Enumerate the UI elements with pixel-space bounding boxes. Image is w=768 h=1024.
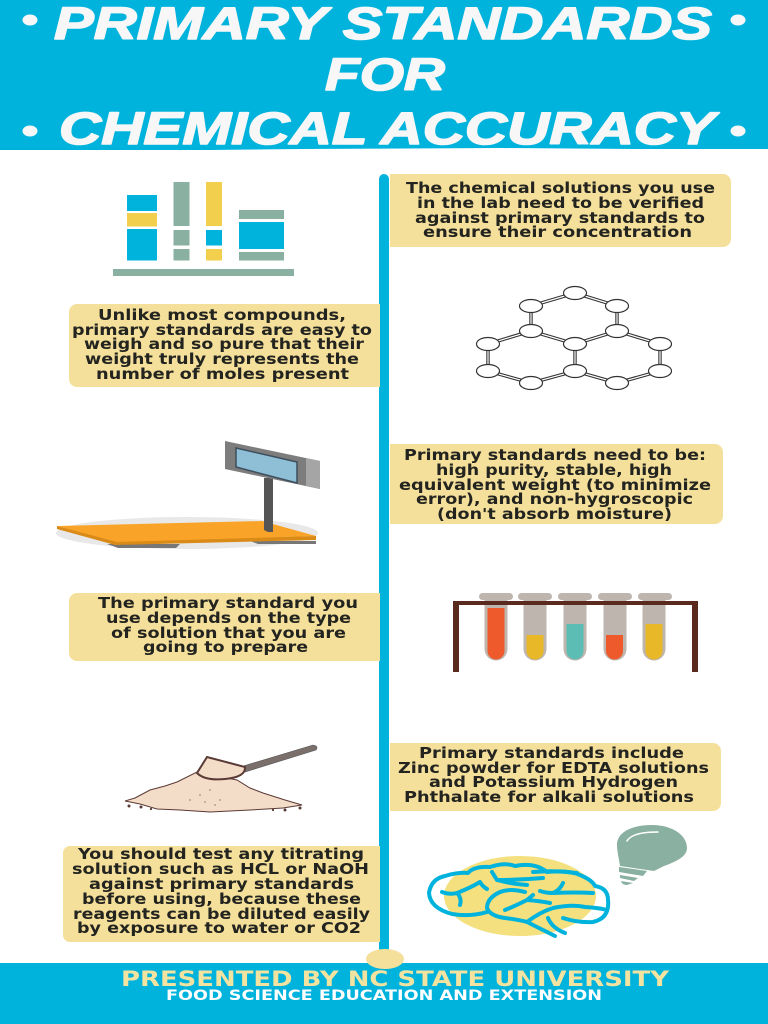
panel: test titrating solution: against primary standards	[89, 875, 354, 893]
panel: chemical solutions: The chemical solutions you use	[406, 179, 715, 197]
title: CHEMICAL ACCURACY	[59, 103, 720, 154]
panel: depends on solution	[69, 593, 380, 661]
panel: examples of standards: and Potassium Hydrogen	[429, 773, 678, 791]
panel: unlike most compounds: number of moles present	[96, 365, 349, 383]
panel: chemical solutions: against primary standards to	[415, 209, 705, 227]
footer subheading: FOOD SCIENCE EDUCATION AND EXTENSION	[166, 988, 602, 1004]
icon: light bulb	[617, 825, 687, 885]
panel: examples of standards: Zinc powder for EDTA solutions	[398, 759, 709, 777]
panel: unlike most compounds: weight truly represents the	[85, 350, 359, 368]
panel: examples of standards	[390, 743, 721, 811]
icon: molecule	[476, 286, 672, 390]
panel: test titrating solution: before using, because these	[82, 890, 361, 908]
title	[54, 0, 720, 154]
panel: test titrating solution: solution such as HCL or NaOH	[72, 860, 369, 878]
timeline end marker	[366, 949, 404, 969]
panel: unlike most compounds	[69, 304, 380, 387]
panel: unlike most compounds: primary standards are easy to	[72, 321, 372, 339]
panel: examples of standards: Phthalate for alkali solutions	[404, 788, 694, 806]
central timeline bar	[379, 174, 389, 955]
panel: chemical solutions: ensure their concentration	[423, 223, 692, 241]
panel: test titrating solution: You should test any titrating	[77, 845, 364, 863]
panel: requirements: (don't absorb moisture)	[437, 505, 672, 523]
panel: depends on solution: of solution that you are	[111, 624, 346, 642]
footer heading: PRESENTED BY NC STATE UNIVERSITY	[121, 967, 670, 991]
title decorative dots	[22, 14, 746, 136]
panel: depends on solution: going to prepare	[143, 638, 308, 656]
panel: test titrating solution	[63, 845, 380, 942]
panel: examples of standards: Primary standards include	[419, 744, 684, 762]
panel: chemical solutions: in the lab need to be verified	[417, 194, 704, 212]
icon: powder and spoon	[125, 745, 317, 812]
icon: books on shelf	[113, 182, 294, 276]
panel: unlike most compounds: weigh and so pure that their	[84, 335, 365, 353]
panel: depends on solution: The primary standard you	[98, 594, 358, 612]
panel: unlike most compounds: Unlike most compounds,	[98, 306, 346, 324]
icon: brain	[429, 856, 608, 936]
panel: requirements: error), and non-hygroscopic	[416, 490, 693, 508]
panel: depends on solution: use depends on the type	[106, 609, 351, 627]
panel: test titrating solution: by exposure to water or CO2	[77, 919, 361, 937]
panel: requirements: equivalent weight (to minimize	[399, 476, 711, 494]
title: FOR	[325, 49, 446, 100]
icon: weighing scale	[56, 441, 320, 549]
header banner	[0, 0, 768, 154]
footer band	[0, 963, 768, 1024]
panel: test titrating solution: reagents can be diluted easily	[73, 905, 370, 923]
panel: requirements: high purity, stable, high	[436, 461, 672, 479]
icon: test tubes in rack	[453, 593, 698, 672]
panel: chemical solutions	[390, 174, 731, 247]
panel: requirements	[390, 444, 723, 524]
panel: requirements: Primary standards need to be:	[404, 446, 706, 464]
